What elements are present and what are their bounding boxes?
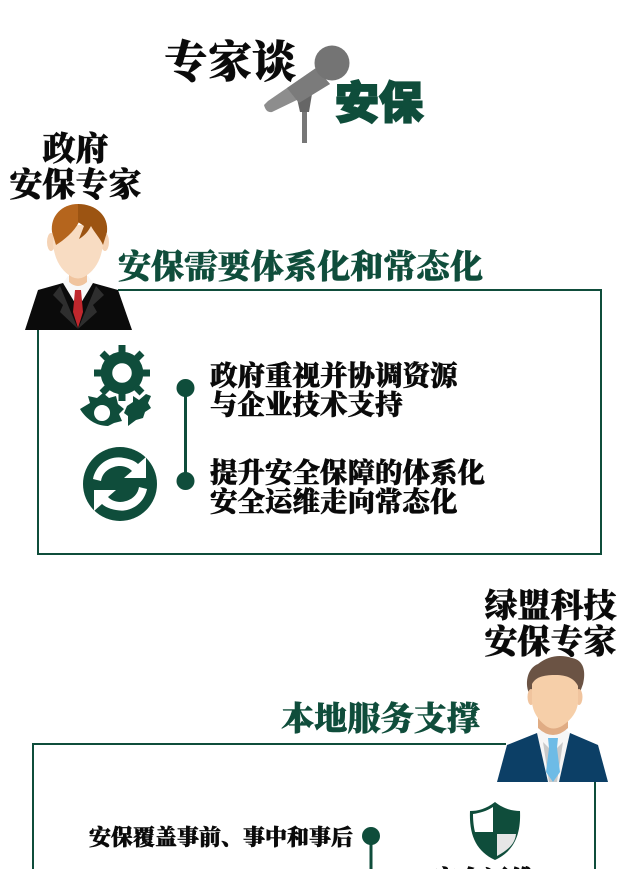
title: 专家谈: 专家谈 xyxy=(164,37,296,87)
title: 安保: 安保 xyxy=(335,79,423,128)
text block: security system: 安全运维走向常态化 xyxy=(210,486,458,517)
timeline: two points xyxy=(176,379,194,490)
speaker label: government expert: 政府 xyxy=(42,131,108,168)
text block: government coordination xyxy=(210,360,460,420)
heading: 本地服务支撑: 本地服务支撑 xyxy=(281,701,480,738)
speaker label: NSFOCUS expert: 绿盟科技 xyxy=(484,588,616,625)
icon: microphone xyxy=(264,46,350,143)
text block: government coordination: 与企业技术支持 xyxy=(210,389,403,420)
speaker label line 2: 安保专家 xyxy=(484,623,616,661)
text block: security system: 提升安全保障的体系化 xyxy=(210,457,485,488)
panel: NSFOCUS expert box xyxy=(33,744,595,869)
timeline: coverage point xyxy=(362,827,380,869)
icon: sync circle xyxy=(83,447,157,521)
icon: shield xyxy=(470,802,520,860)
text block: government coordination: 政府重视并协调资源 xyxy=(210,360,460,391)
text block: security system xyxy=(210,457,485,517)
icon: gears xyxy=(80,345,151,426)
avatar: NSFOCUS expert xyxy=(497,656,608,782)
speaker label line 2: 安保专家 xyxy=(10,166,142,204)
text block: coverage: 安保覆盖事前、事中和事后 xyxy=(89,825,353,850)
avatar: government expert xyxy=(25,204,132,330)
heading: 安保需要体系化和常态化: 安保需要体系化和常态化 xyxy=(118,248,483,286)
panel: government expert box xyxy=(38,290,601,554)
